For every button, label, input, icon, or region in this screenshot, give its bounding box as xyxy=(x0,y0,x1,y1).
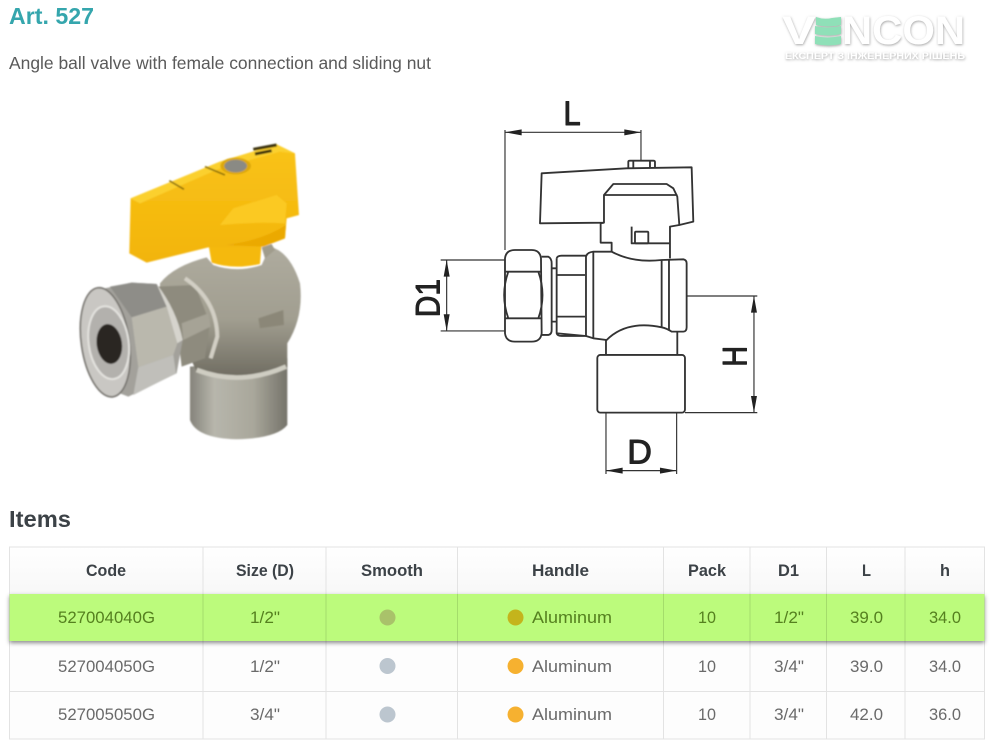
labels: dimensions: D1 xyxy=(409,279,447,317)
row 3: 10 xyxy=(698,705,716,724)
row 3: 3/4" xyxy=(250,705,280,724)
washer xyxy=(542,257,552,335)
handle markings xyxy=(169,167,225,189)
table: Size (D) xyxy=(236,562,294,580)
table: D1 xyxy=(778,562,799,580)
first hex nut xyxy=(505,250,542,342)
table: Handle xyxy=(532,562,589,580)
dimension D1 xyxy=(441,260,505,331)
table header xyxy=(10,547,984,594)
handle screw xyxy=(628,161,655,168)
highlighted row: Aluminum xyxy=(532,608,612,627)
table: Code xyxy=(86,562,126,580)
table: Smooth xyxy=(361,562,423,580)
subtitle: Angle ball valve with female connection and sliding nut xyxy=(9,53,431,73)
row 3: Aluminum xyxy=(532,705,612,724)
logo: Vencon: ЕКСПЕРТ З ІНЖЕНЕРНИХ РІШЕНЬ xyxy=(785,51,965,62)
highlighted row: 1/2" xyxy=(250,608,280,627)
handle screw xyxy=(220,158,251,174)
row 3: 3/4" xyxy=(774,705,804,724)
lower cylinder xyxy=(190,358,287,439)
product photo: angle ball valve xyxy=(74,144,301,439)
row 3: 36.0 xyxy=(929,705,961,724)
table: Pack xyxy=(688,562,727,580)
nut face xyxy=(74,285,137,400)
row 3 xyxy=(58,705,961,724)
handle outline xyxy=(540,167,693,225)
highlighted row: 10 xyxy=(698,608,716,627)
hex nut xyxy=(83,283,183,397)
title: Art. 527 xyxy=(9,3,94,29)
row 2: 39.0 xyxy=(850,657,883,676)
logo: Vencon: V xyxy=(782,9,816,53)
valve body xyxy=(160,247,301,378)
labels: dimensions: L xyxy=(563,95,581,133)
collar ring xyxy=(185,278,217,358)
body casting mark xyxy=(258,310,284,328)
heading: items: Items xyxy=(9,506,71,532)
logo: Vencon xyxy=(782,9,965,62)
yellow handle xyxy=(129,144,299,263)
highlighted row xyxy=(10,594,984,641)
row 2: Aluminum xyxy=(532,657,612,676)
handle stem xyxy=(208,243,262,267)
socket rim xyxy=(197,367,286,378)
row 2: 34.0 xyxy=(929,657,961,676)
labels: dimensions: D xyxy=(627,433,652,471)
highlighted row: 39.0 xyxy=(850,608,883,627)
handle cap xyxy=(601,195,679,258)
highlighted row: 34.0 xyxy=(929,608,961,627)
icon: logo bars xyxy=(815,17,841,46)
table: L xyxy=(862,562,871,580)
row 2: 1/2" xyxy=(250,657,280,676)
neck xyxy=(606,332,677,355)
labels: dimensions xyxy=(409,95,755,471)
dimension D xyxy=(606,413,677,474)
table xyxy=(10,547,984,739)
valve body xyxy=(586,252,687,340)
dimension L xyxy=(505,129,641,250)
female socket xyxy=(597,355,685,413)
nut opening xyxy=(94,322,125,366)
dimension H xyxy=(685,296,757,413)
technical drawing xyxy=(409,95,757,474)
row 2: 10 xyxy=(698,657,716,676)
labels: dimensions: H xyxy=(717,346,755,367)
highlighted row: 527004040G xyxy=(58,608,155,627)
second hex xyxy=(557,256,586,336)
row 3: 527005050G xyxy=(58,705,155,724)
row 2: 3/4" xyxy=(774,657,804,676)
row 3: 42.0 xyxy=(850,705,883,724)
logo: Vencon: NCON xyxy=(842,9,965,53)
table: h xyxy=(940,562,950,580)
neck between nut and collar xyxy=(157,285,210,367)
row 2: 527004050G xyxy=(58,657,155,676)
row 2 xyxy=(58,657,961,676)
highlighted row: 1/2" xyxy=(774,608,804,627)
